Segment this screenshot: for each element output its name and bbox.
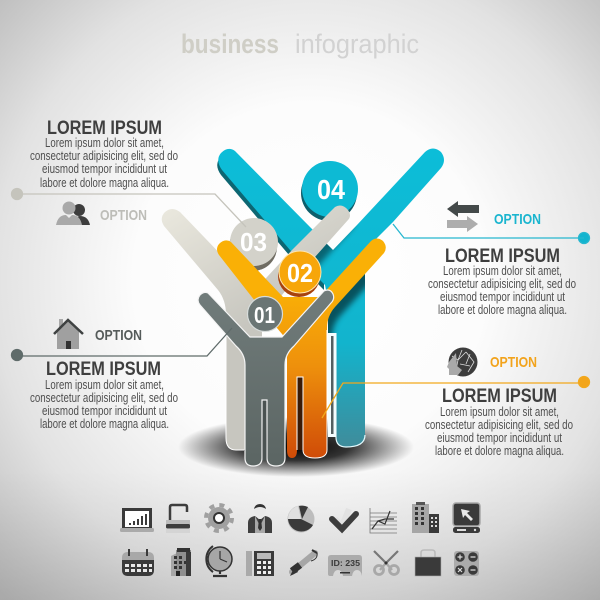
- text block: bottom left: [30, 359, 178, 431]
- icon row 1: [120, 502, 480, 533]
- icon row 2: [122, 546, 479, 576]
- icon: ID card: [328, 555, 362, 576]
- connector: option bottom-right: [322, 376, 590, 418]
- badge 03: [229, 218, 278, 271]
- text block: bottom left: LOREM IPSUM: [46, 359, 161, 380]
- connector: option top-right: [393, 224, 590, 244]
- figure 02: orange person: [217, 238, 391, 459]
- icon: office building: [171, 548, 191, 576]
- icon: scissors: [374, 551, 398, 574]
- figure 04: blue person: [217, 148, 444, 447]
- icon: gear: [206, 505, 232, 531]
- icon: briefcase: [415, 550, 441, 576]
- connector: option bottom-left: [12, 328, 232, 360]
- icon: check mark: [332, 509, 356, 529]
- option label: bottom left: OPTION: [95, 327, 142, 344]
- icon: phone calculator: [246, 551, 274, 576]
- icon: laptop chart: [120, 508, 154, 532]
- title: infographic: [295, 29, 419, 59]
- connector: option top-left: [12, 188, 246, 227]
- text block: top right: LOREM IPSUM: [445, 246, 560, 267]
- badge 04: [301, 161, 358, 221]
- text block: top right: [428, 246, 576, 317]
- icon: buildings: [412, 502, 439, 533]
- icon: open lock: [166, 505, 190, 533]
- icon: people: [56, 202, 90, 225]
- text block: top left: LOREM IPSUM: [47, 118, 162, 139]
- figure 01: dark grey person: [198, 290, 334, 466]
- text block: bottom right: eiusmod tempor incididunt ut: [437, 430, 562, 445]
- floor shadow: [178, 417, 414, 477]
- text block: bottom left: Lorem ipsum dolor sit amet,: [45, 377, 164, 392]
- icon: pie chart: [288, 506, 314, 532]
- icon: line chart: [370, 508, 397, 533]
- option label: top right: OPTION: [494, 211, 541, 228]
- text block: bottom right: Lorem ipsum dolor sit amet,: [440, 404, 559, 419]
- icon: calendar: [122, 549, 154, 576]
- icon: pen: [290, 550, 317, 576]
- option label: bottom right: OPTION: [490, 354, 537, 371]
- badge 03: 03: [240, 227, 267, 257]
- icon: arrows: [447, 201, 479, 232]
- text block: top right: Lorem ipsum dolor sit amet,: [443, 263, 562, 278]
- icon: ID card: ID: 235: [331, 559, 361, 568]
- text block: bottom left: consectetur adipisicing elit, sed do: [30, 390, 178, 405]
- icon: computer cursor: [453, 503, 480, 533]
- text block: top left: Lorem ipsum dolor sit amet,: [45, 135, 164, 150]
- badge 01: [248, 296, 282, 332]
- badge 01: 01: [254, 302, 275, 328]
- text block: bottom right: LOREM IPSUM: [442, 386, 557, 407]
- text block: bottom right: [425, 386, 573, 458]
- text block: top left: consectetur adipisicing elit, sed do: [30, 148, 178, 163]
- central figures: [162, 148, 444, 466]
- text block: bottom left: eiusmod tempor incididunt ut: [42, 403, 167, 418]
- figure 03: light grey person: [162, 206, 354, 458]
- text block: top left: [30, 118, 178, 190]
- icon: math symbols: [454, 551, 479, 576]
- option label: top left: OPTION: [100, 207, 147, 224]
- title: [181, 29, 419, 59]
- text block: top left: labore et dolore magna aliqua.: [40, 175, 169, 190]
- icon: globe clock: [206, 546, 232, 576]
- icon: businessman: [248, 504, 272, 533]
- title: business: [181, 29, 279, 59]
- icon: head with network: [447, 348, 478, 376]
- badge 02: [278, 251, 321, 297]
- badge 04: 04: [317, 174, 345, 205]
- text block: top left: eiusmod tempor incididunt ut: [42, 161, 167, 176]
- text block: bottom left: labore et dolore magna aliqua.: [40, 416, 169, 431]
- icon: house: [54, 319, 83, 349]
- badge 02: 02: [287, 258, 313, 288]
